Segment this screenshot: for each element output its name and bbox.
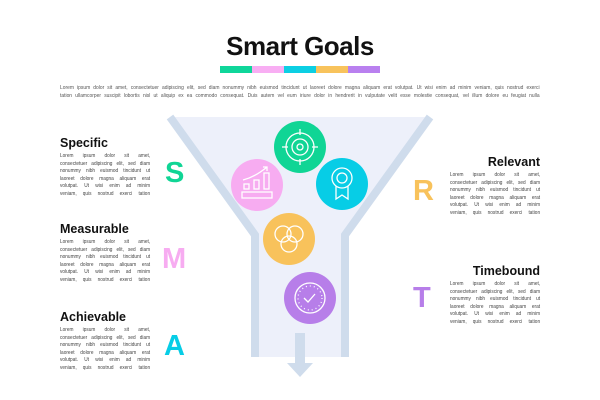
- block: Specific: Specific: [60, 136, 108, 150]
- color bars: [220, 66, 380, 73]
- block: Measurable: Measurable: [60, 222, 129, 236]
- block: Relevant: nonummy nibh euismod tincidunt ut: [450, 187, 540, 193]
- block: Measurable: laoreet dolore magna aliquam erat: [60, 262, 150, 268]
- letter R: R: [413, 175, 434, 207]
- block: Achievable: [60, 310, 150, 371]
- title: Smart Goals: [226, 31, 374, 61]
- block: Timebound: laoreet dolore magna aliquam erat: [450, 304, 540, 310]
- block: Measurable: nonummy nibh euismod tincidunt ut: [60, 254, 150, 260]
- intro text: Lorem ipsum dolor sit amet, consectetuer adipiscing elit, sed diam nonummy nibh euismod tincidunt ut laoreet dolore magna aliquam erat volutpat. Ut wisi enim ad minim veniam, quis nostrud exerci: [60, 85, 540, 91]
- funnel body: [170, 117, 430, 357]
- block: Relevant: volutpat. Ut wisi enim ad minim: [450, 202, 540, 208]
- letter T: T: [413, 282, 431, 314]
- block: Measurable: [60, 222, 150, 283]
- block: Measurable: volutpat. Ut wisi enim ad minim: [60, 269, 150, 275]
- block: Relevant: Relevant: [488, 155, 540, 169]
- block: Relevant: consectetuer adipiscing elit, sed diam: [450, 180, 540, 186]
- block: Measurable: veniam, quis nostrud exerci tation: [60, 277, 150, 283]
- block: Specific: laoreet dolore magna aliquam erat: [60, 176, 150, 182]
- icon: chart (pink): [231, 159, 283, 211]
- intro text: [60, 85, 540, 99]
- icon: badge (cyan): [316, 158, 368, 210]
- block: Timebound: volutpat. Ut wisi enim ad minim: [450, 311, 540, 317]
- block: Achievable: Lorem ipsum dolor sit amet,: [60, 327, 150, 333]
- icon: clock (purple): [284, 272, 336, 324]
- block: Timebound: veniam, quis nostrud exerci tation: [450, 319, 540, 325]
- block: Relevant: veniam, quis nostrud exerci tation: [450, 210, 540, 216]
- block: Measurable: consectetuer adipiscing elit, sed diam: [60, 247, 150, 253]
- icon: target (green): [274, 121, 326, 173]
- block: Measurable: Lorem ipsum dolor sit amet,: [60, 239, 150, 245]
- block: Specific: veniam, quis nostrud exerci tation: [60, 191, 150, 197]
- block: Specific: consectetuer adipiscing elit, sed diam: [60, 161, 150, 167]
- block: Timebound: nonummy nibh euismod tincidunt ut: [450, 296, 540, 302]
- block: Relevant: laoreet dolore magna aliquam erat: [450, 195, 540, 201]
- block: Specific: Lorem ipsum dolor sit amet,: [60, 153, 150, 159]
- block: Achievable: veniam, quis nostrud exerci tation: [60, 365, 150, 371]
- block: Timebound: [450, 264, 540, 325]
- block: Specific: nonummy nibh euismod tincidunt ut: [60, 168, 150, 174]
- block: Specific: volutpat. Ut wisi enim ad minim: [60, 183, 150, 189]
- block: Achievable: consectetuer adipiscing elit, sed diam: [60, 335, 150, 341]
- block: Relevant: Lorem ipsum dolor sit amet,: [450, 172, 540, 178]
- letter A: A: [164, 330, 185, 362]
- block: Timebound: Lorem ipsum dolor sit amet,: [450, 281, 540, 287]
- block: Specific: [60, 136, 150, 197]
- block: Achievable: laoreet dolore magna aliquam erat: [60, 350, 150, 356]
- block: Timebound: Timebound: [473, 264, 540, 278]
- block: Achievable: nonummy nibh euismod tincidunt ut: [60, 342, 150, 348]
- letter M: M: [162, 243, 186, 275]
- intro text: tation ullamcorper suscipit lobortis nisl ut aliquip ex ea commodo consequat. Duis autem vel eum iriure dolor in hendrerit in vulputate velit esse molestie consequat, vel illum dolore eu feugiat nulla: [60, 93, 540, 99]
- block: Achievable: volutpat. Ut wisi enim ad minim: [60, 357, 150, 363]
- block: Timebound: consectetuer adipiscing elit, sed diam: [450, 289, 540, 295]
- block: Relevant: [450, 155, 540, 216]
- icon: venn (orange): [263, 213, 315, 265]
- arrow: [287, 333, 313, 377]
- letter S: S: [165, 157, 184, 189]
- block: Achievable: Achievable: [60, 310, 126, 324]
